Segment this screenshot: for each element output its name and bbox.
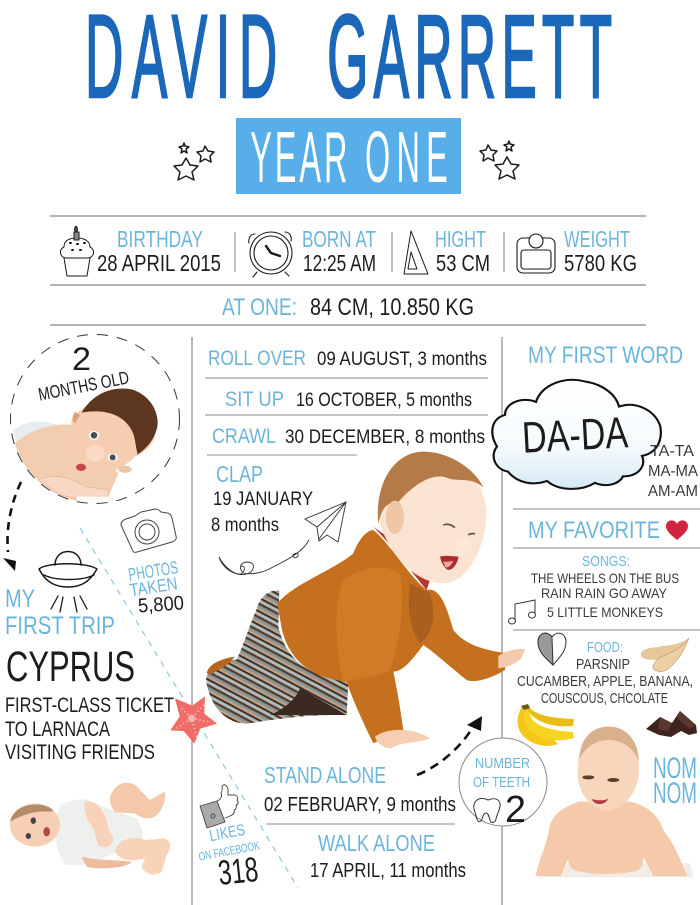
text: photos taken: PHOTOS [127, 557, 179, 585]
text: photos taken [127, 557, 185, 618]
text: other words: TA-TA [650, 443, 694, 460]
icon: ufo [39, 552, 97, 612]
text: likes on facebook: LIKES [208, 822, 247, 845]
photo: smiling baby [536, 727, 693, 877]
text: weight [564, 226, 637, 276]
text: born at: BORN AT [302, 226, 376, 252]
text: birthday: BIRTHDAY [117, 226, 203, 252]
banner: year one: YEAR [250, 116, 347, 197]
text: walk alone: WALK ALONE [318, 830, 435, 856]
icon: cloud [492, 380, 661, 489]
arrow: dashed to teeth [417, 716, 482, 775]
text: trip details: FIRST-CLASS TICKET [5, 694, 174, 717]
text: songs: 5 LITTLE MONKEYS [547, 604, 663, 620]
text: food: PARSNIP [576, 656, 630, 673]
icon: cupcake [60, 226, 94, 276]
text: my first trip: MY [5, 585, 35, 613]
panel: number of teeth: 2 [505, 789, 526, 831]
text: trip details [5, 694, 174, 764]
text: hight: 53 CM [436, 250, 490, 276]
text: roll over: ROLL OVER [208, 347, 306, 370]
text: other words: MA-MA [648, 463, 698, 480]
icon: left stars [174, 143, 214, 180]
text: songs: SONGS: [582, 553, 630, 570]
icon: bananas [518, 704, 574, 746]
text: da-da: DA-DA [521, 408, 630, 463]
icon: tooth [474, 798, 500, 823]
text: likes on facebook: 318 [216, 850, 260, 893]
text: 2 months old [37, 341, 131, 405]
icon: triangle ruler [404, 231, 428, 274]
text: food: FOOD: [587, 639, 623, 656]
panel: number of teeth: NUMBER [475, 755, 530, 772]
text: other words: AM-AM [648, 483, 698, 500]
text: my first trip: FIRST TRIP [5, 612, 115, 640]
panel: number of teeth [459, 738, 547, 831]
icon: scale [517, 234, 555, 273]
text: birthday: 28 APRIL 2015 [97, 250, 221, 276]
text: roll over: 09 AUGUST, 3 months [317, 349, 487, 370]
text: clap [211, 461, 313, 536]
text: stand alone: STAND ALONE [264, 762, 386, 788]
panel: my first word [492, 342, 698, 500]
panel: birth facts [50, 216, 646, 325]
text: crawl: 30 DECEMBER, 8 months [285, 427, 485, 448]
photo: baby lying on arms [13, 389, 158, 507]
panel: milestones list [205, 347, 488, 536]
text: roll over [208, 347, 487, 370]
text: born at: 12:25 AM [303, 250, 376, 276]
icon: camera [121, 509, 176, 552]
text: born at [302, 226, 376, 276]
panel: number of teeth: OF TEETH [473, 774, 530, 791]
panel: two months photo [10, 334, 180, 507]
icon: chocolate [646, 711, 697, 737]
text: crawl: CRAWL [212, 425, 276, 448]
text: walk alone: 17 APRIL, 11 months [310, 860, 466, 882]
text: clap: CLAP [216, 461, 263, 487]
text: nom nom [653, 752, 697, 810]
text: at one: AT ONE: [222, 294, 297, 321]
icon: paper plane with trail [219, 502, 346, 575]
text: clap: 8 months [211, 515, 279, 536]
text: other words [648, 443, 698, 500]
photo: crawling baby [206, 452, 525, 748]
text: crawl [212, 425, 485, 448]
text: clap: 19 JANUARY [213, 489, 313, 510]
text: photos taken: 5,800 [137, 592, 185, 618]
text: sit up: SIT UP [225, 388, 284, 411]
text: photos taken: TAKEN [128, 573, 179, 601]
icon: starfish [170, 696, 217, 744]
icon: half-shaded heart [538, 633, 566, 665]
icon: heart [666, 520, 688, 540]
text: likes on facebook [197, 822, 261, 893]
arrow: dashed curve to ufo [3, 482, 21, 571]
banner: year one: ONE [365, 116, 448, 197]
text: 2 months old: 2 [72, 341, 91, 377]
text: trip details: TO LARNACA [5, 718, 110, 741]
heading: my favorite: MY FAVORITE [528, 517, 660, 544]
text: hight [435, 226, 490, 276]
icon: facebook thumbs up [200, 785, 238, 828]
text: walk alone [310, 830, 466, 882]
text: at one: 84 CM, 10.850 KG [310, 294, 474, 321]
text: weight: 5780 KG [564, 250, 637, 276]
icon: music note [508, 600, 536, 624]
text: stand alone: 02 FEBRUARY, 9 months [264, 794, 456, 816]
text: 2 months old: MONTHS OLD [37, 367, 131, 405]
text: trip details: VISITING FRIENDS [5, 741, 155, 764]
text: at one [222, 294, 474, 321]
photo: baby on back [10, 783, 170, 874]
text: food [517, 639, 693, 707]
text: sit up: 16 OCTOBER, 5 months [296, 390, 472, 411]
text: songs [531, 553, 679, 620]
text: weight: WEIGHT [564, 226, 630, 252]
title [85, 0, 612, 123]
text: my first trip [5, 585, 115, 640]
banner: year one [236, 116, 461, 197]
icon: right stars [480, 141, 519, 179]
text: stand alone [264, 762, 456, 816]
text: hight: HIGHT [435, 226, 486, 252]
text: sit up [225, 388, 472, 411]
text: songs: RAIN RAIN GO AWAY [541, 585, 668, 601]
text: cyprus: CYPRUS [6, 643, 135, 691]
icon: alarm clock [249, 232, 292, 277]
text: likes on facebook: ON FACEBOOK [197, 838, 261, 864]
icon: parsnips [641, 638, 689, 672]
text: birthday [97, 226, 221, 276]
